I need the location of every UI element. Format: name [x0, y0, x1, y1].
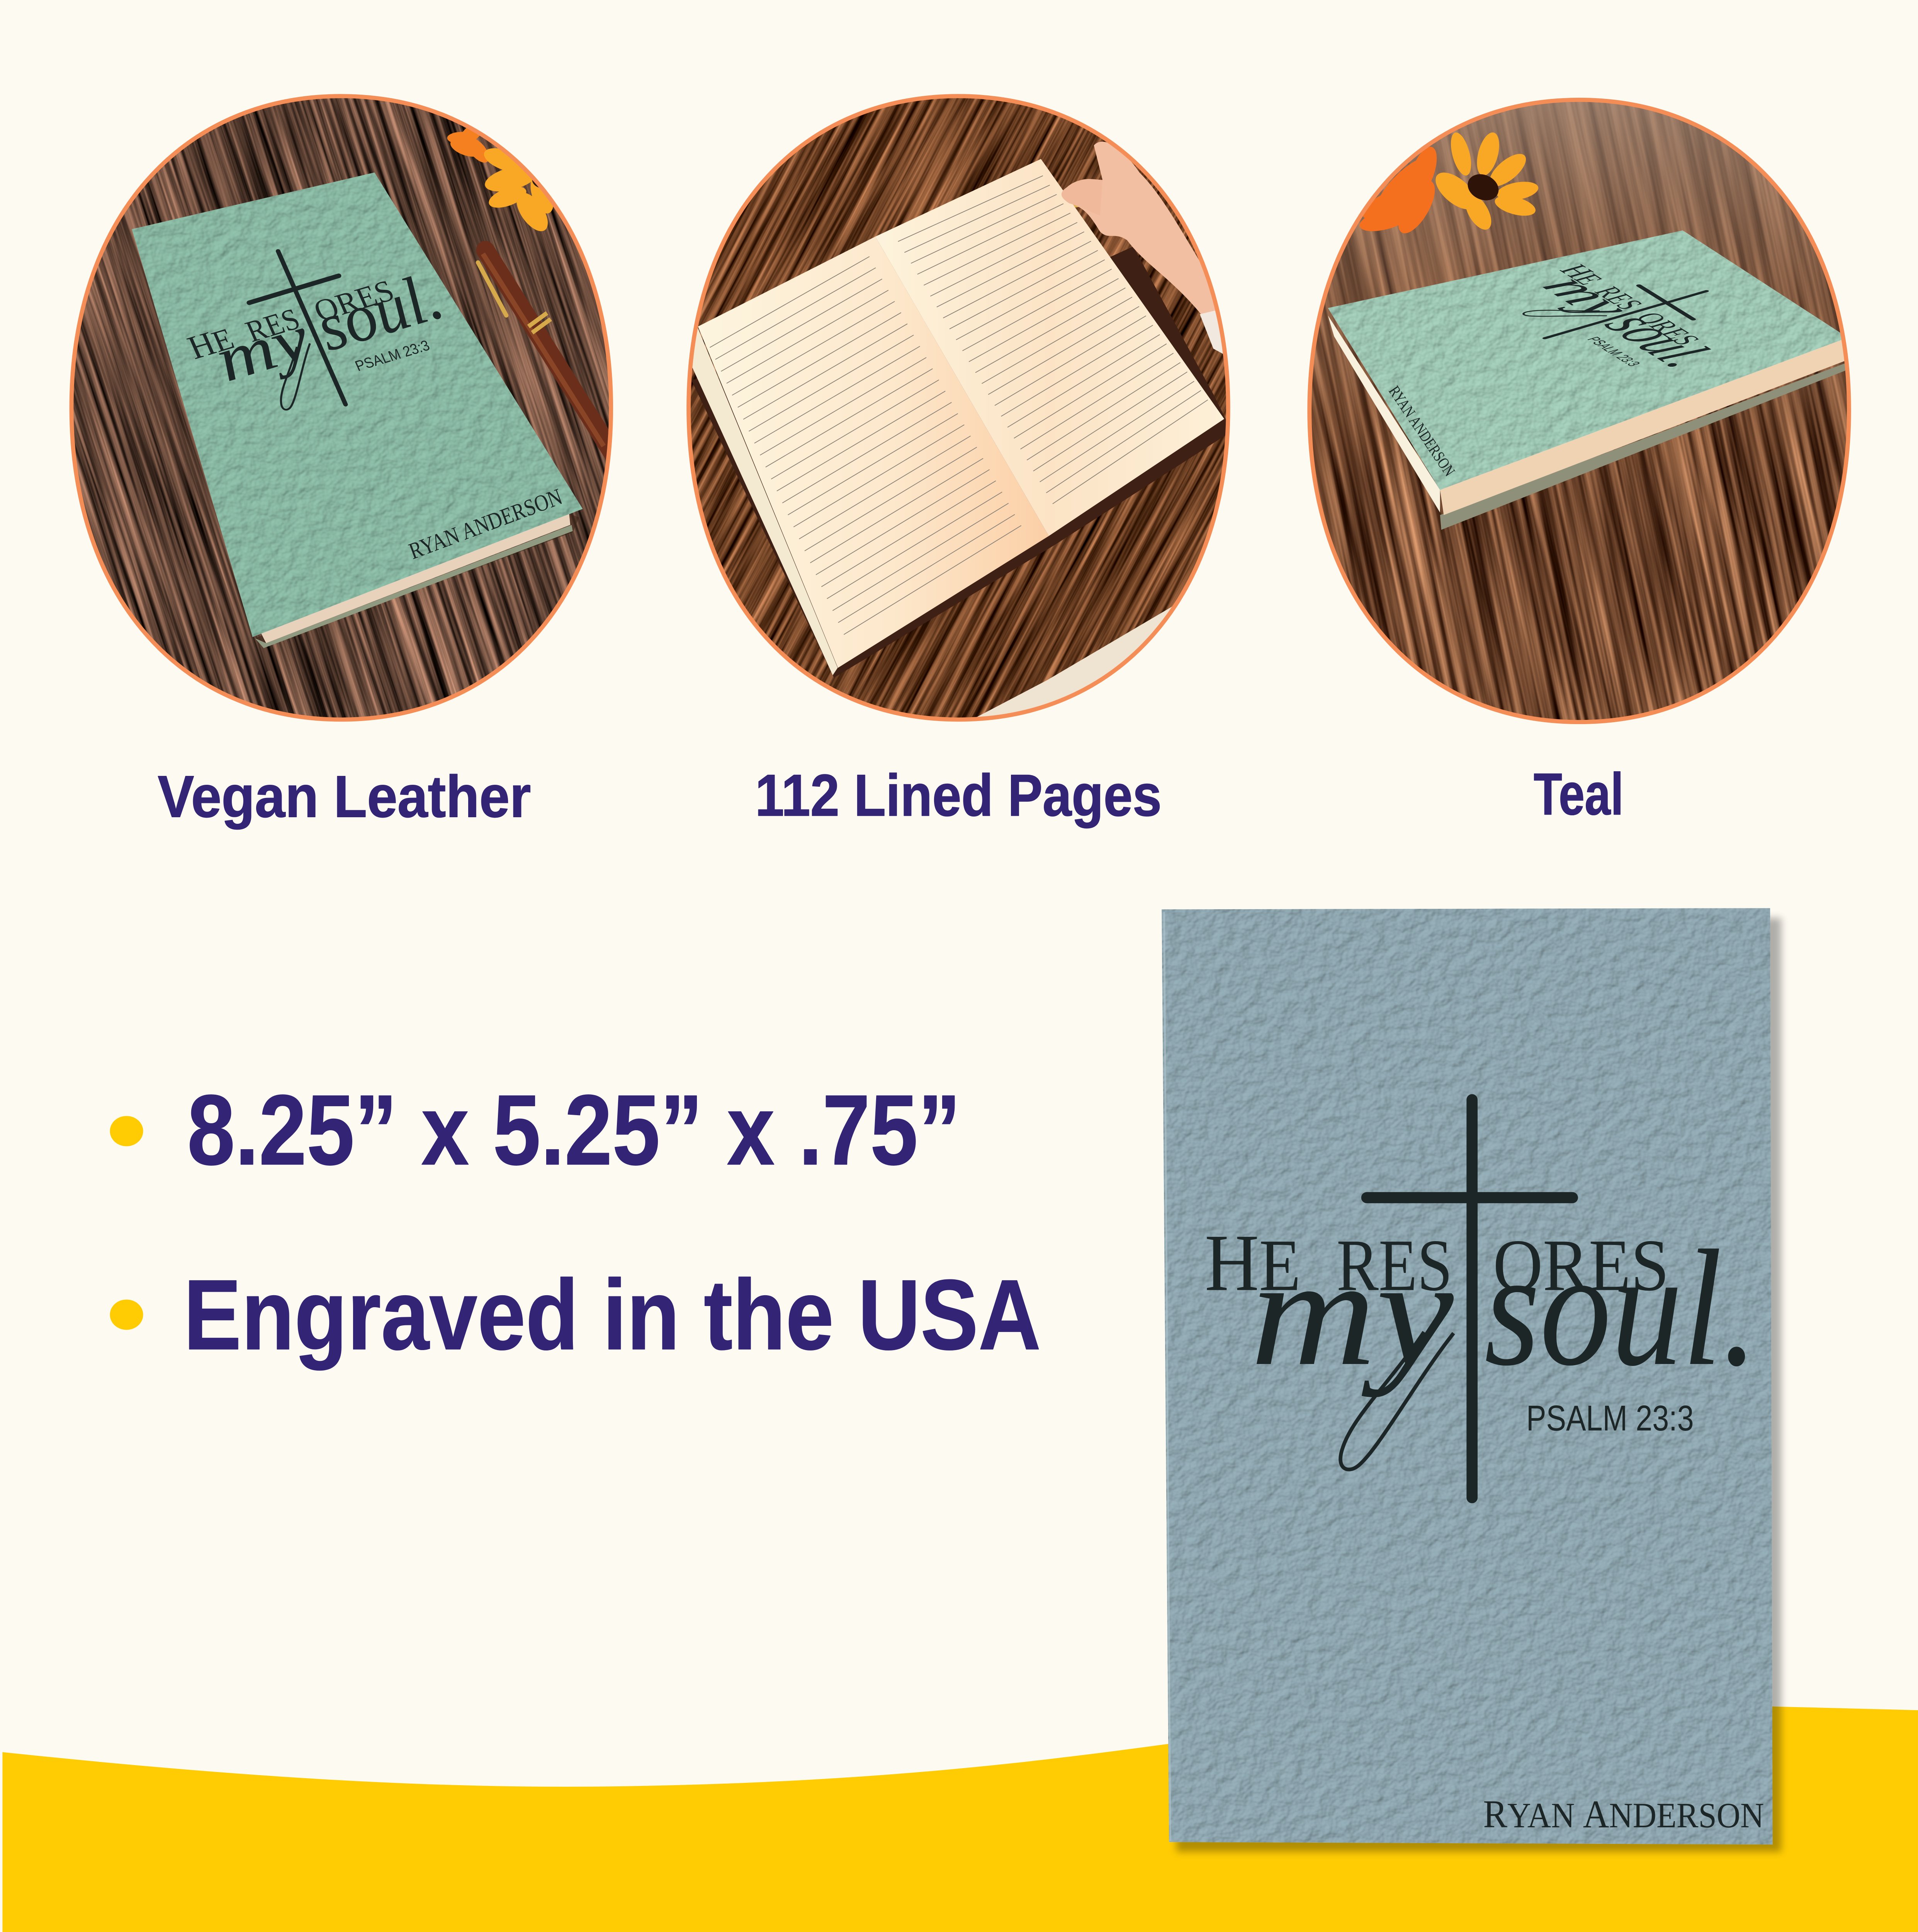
- engraved heading: ORES: [1493, 1225, 1669, 1306]
- engraved heading: RES: [1337, 1225, 1453, 1306]
- hand holding pen: [1047, 142, 1229, 357]
- engraved design, angled: [1473, 247, 1784, 386]
- engraved design: PSALM 23:3: [352, 337, 432, 374]
- caption: teal: Teal: [1534, 761, 1624, 827]
- icon: flowers: [447, 118, 558, 236]
- script text: my soul: [1250, 1216, 1758, 1469]
- cross: [1361, 1094, 1578, 1503]
- name engraving, angled: RYAN ANDERSON: [1385, 383, 1459, 480]
- engraved design: ORES: [309, 274, 399, 328]
- engraved design, angled: HE: [1551, 261, 1613, 288]
- engraved heading: [1205, 1218, 1669, 1308]
- photo: teal journal side view with sunflower: [1025, 0, 1918, 917]
- caption: lined pages: 112 Lined Pages: [755, 762, 1162, 828]
- name engraving: RYAN ANDERSON: [406, 484, 566, 565]
- engraved design, angled: PSALM 23:3: [1583, 335, 1644, 368]
- engraved design, angled: RES: [1587, 284, 1650, 313]
- open book dark cover: [691, 247, 1232, 678]
- caption: vegan leather: Vegan Leather: [158, 764, 531, 830]
- hand over page: [1062, 179, 1103, 216]
- icon: wooden pen: [478, 250, 616, 458]
- script text: my soul: soul.: [1485, 1216, 1758, 1400]
- woven rug: [972, 592, 1189, 739]
- engraved design: [161, 212, 471, 441]
- photo: open journal with lined pages: [338, 0, 1579, 1000]
- engraved heading: HE: [1205, 1218, 1301, 1308]
- verse reference: PSALM 23:3: [1526, 1398, 1694, 1438]
- engraved design, angled: soul.: [1588, 307, 1735, 374]
- right lined page: [875, 159, 1224, 536]
- photo: teal journal with pen and flowers: [70, 94, 613, 722]
- engraved design: soul.: [303, 259, 454, 365]
- script text: my soul: my: [1250, 1227, 1455, 1398]
- notebook cover: [132, 172, 583, 648]
- engraved design: HE: [182, 319, 239, 366]
- closed journal: [1328, 230, 1848, 530]
- left lined page: [691, 236, 1049, 675]
- bullet: engraved in the USA: Engraved in the USA: [183, 1259, 1041, 1371]
- yellow wave band: [2, 1705, 1918, 1932]
- engraved design, angled: ORES: [1628, 310, 1707, 348]
- engraved design, angled: my: [1527, 270, 1650, 323]
- large journal front cover: [1162, 908, 1781, 1852]
- icon: orange and yellow flowers: [1357, 130, 1540, 239]
- bullet: dimensions: 8.25” x 5.25” x .75”: [187, 1074, 961, 1185]
- engraved design: RES: [241, 302, 305, 349]
- engraved design: my: [204, 303, 321, 395]
- personalised name: RYAN ANDERSON: [1483, 1793, 1764, 1836]
